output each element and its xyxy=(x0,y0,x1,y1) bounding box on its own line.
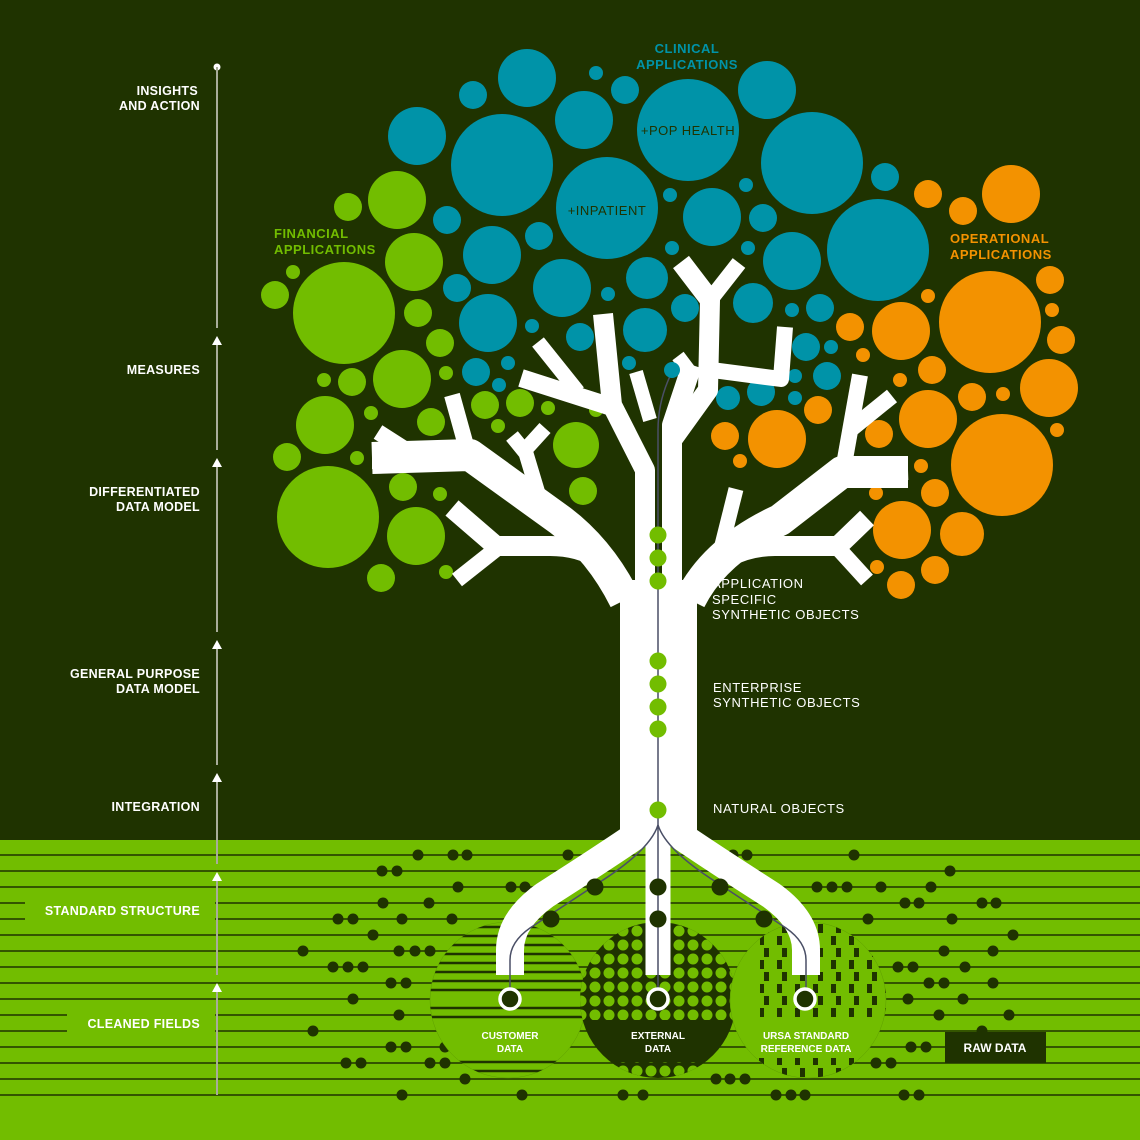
axis labels: GENERAL PURPOSE xyxy=(70,667,200,681)
raw data label: RAW DATA xyxy=(964,1041,1027,1055)
category labels: APPLICATIONS xyxy=(274,242,376,257)
axis labels: CLEANED FIELDS xyxy=(87,1017,200,1031)
data source: ursa standard reference data: URSA STANDARD xyxy=(763,1031,849,1042)
category labels: APPLICATIONS xyxy=(636,57,738,72)
data source: customer data: CUSTOMER xyxy=(481,1031,539,1042)
data source: external data xyxy=(578,920,738,1082)
trunk labels: SPECIFIC xyxy=(712,592,777,607)
raw data label xyxy=(945,1032,1046,1063)
data source: customer data xyxy=(430,922,583,1078)
trunk data line xyxy=(510,372,806,990)
axis labels: INSIGHTS xyxy=(137,84,198,98)
trunk nodes xyxy=(500,362,815,1009)
ground xyxy=(0,840,1140,1140)
trunk labels: ENTERPRISE xyxy=(713,680,802,695)
tree xyxy=(372,262,908,975)
trunk labels: NATURAL OBJECTS xyxy=(713,801,845,816)
data source: ursa standard reference data xyxy=(730,920,890,1082)
trunk labels: SYNTHETIC OBJECTS xyxy=(713,695,860,710)
trunk labels xyxy=(712,576,860,816)
category labels: +INPATIENT xyxy=(568,203,646,218)
category labels: APPLICATIONS xyxy=(950,247,1052,262)
data source: ursa standard reference data: REFERENCE DATA xyxy=(761,1044,851,1055)
axis labels xyxy=(25,84,215,1036)
category labels xyxy=(274,41,1052,262)
bubbles: teal clinical xyxy=(388,49,929,410)
trunk labels: SYNTHETIC OBJECTS xyxy=(712,607,859,622)
data source: external data: DATA xyxy=(645,1044,671,1055)
data source: external data: EXTERNAL xyxy=(631,1031,685,1042)
bubbles: green financial xyxy=(261,171,603,592)
root dots on lines xyxy=(298,850,1018,1100)
category labels: +POP HEALTH xyxy=(641,123,735,138)
category labels: FINANCIAL xyxy=(274,226,349,241)
axis labels: STANDARD STRUCTURE xyxy=(45,904,200,918)
axis labels: DATA MODEL xyxy=(116,500,200,514)
category labels: OPERATIONAL xyxy=(950,231,1049,246)
axis labels: MEASURES xyxy=(127,363,200,377)
trunk labels: APPLICATION xyxy=(712,576,804,591)
axis labels: INTEGRATION xyxy=(112,800,200,814)
data source: customer data: DATA xyxy=(497,1044,523,1055)
bubbles: orange operational xyxy=(711,165,1078,599)
category labels: CLINICAL xyxy=(655,41,719,56)
axis labels: AND ACTION xyxy=(119,99,200,113)
axis labels: DIFFERENTIATED xyxy=(89,485,200,499)
axis xyxy=(212,64,222,1095)
axis labels: DATA MODEL xyxy=(116,682,200,696)
